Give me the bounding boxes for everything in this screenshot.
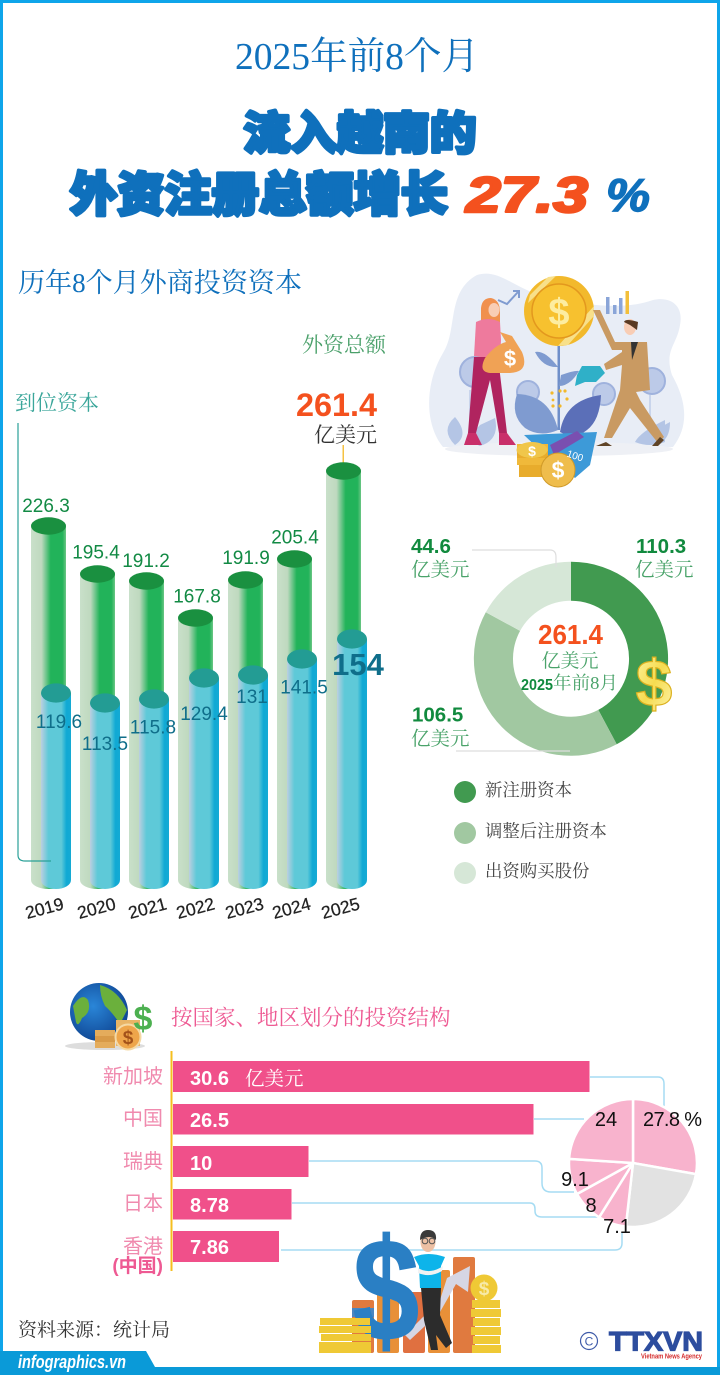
bars: disbursed capital bbox=[41, 629, 367, 889]
callout: 2025 total bbox=[296, 387, 377, 463]
illustration: man leaning on dollar sign bbox=[319, 1210, 501, 1372]
orange chart columns bbox=[352, 1257, 475, 1353]
year axis labels bbox=[23, 893, 362, 923]
banknotes and coins: $ bbox=[552, 457, 565, 483]
year axis labels: 2022 bbox=[174, 894, 217, 923]
values: disbursed: 113.5 bbox=[82, 734, 128, 755]
icon: globe with coins: $ bbox=[134, 1000, 153, 1038]
bar: Singapore: 新加坡 bbox=[103, 1065, 163, 1088]
bar: Hong Kong: 7.86 bbox=[190, 1237, 229, 1259]
logo: TTXVN: C bbox=[585, 1334, 594, 1348]
donut value labels bbox=[411, 535, 694, 750]
logo: TTXVN bbox=[580, 1326, 703, 1360]
pie labels: 8 bbox=[585, 1195, 597, 1217]
gold coin bbox=[524, 276, 594, 346]
bar: China: 中国 bbox=[123, 1107, 163, 1130]
values: disbursed: 154 bbox=[332, 647, 385, 682]
values: disbursed: 141.5 bbox=[280, 678, 328, 698]
label: disbursed capital bbox=[15, 391, 99, 861]
donut value labels: 110.3 bbox=[636, 535, 686, 558]
values: disbursed: 115.8 bbox=[130, 718, 176, 738]
bars: total foreign investment bbox=[31, 462, 361, 889]
section heading: by country: 按国家、地区划分的投资结构 bbox=[171, 1006, 451, 1030]
bar: Japan: 日本 bbox=[123, 1192, 163, 1215]
pie labels: 9.1 bbox=[561, 1169, 589, 1191]
chart: 3D cylinder bars bbox=[22, 462, 385, 923]
donut centre text bbox=[521, 619, 618, 694]
donut value labels: 44.6 bbox=[411, 535, 451, 558]
bar: Japan: 8.78 bbox=[190, 1195, 229, 1217]
banknotes and coins: $ bbox=[528, 443, 536, 459]
main headline: 外资注册总额增长 bbox=[70, 168, 448, 221]
values: disbursed: 131 bbox=[236, 687, 268, 708]
rising arrow bbox=[405, 1266, 470, 1340]
values: disbursed: 119.6 bbox=[36, 712, 82, 733]
illustration: investors growing money tree bbox=[429, 274, 684, 487]
logo: TTXVN: TTXVN bbox=[609, 1326, 703, 1356]
donut legend bbox=[454, 780, 607, 884]
values: total: 167.8 bbox=[173, 586, 221, 608]
small background coin flowers bbox=[460, 357, 665, 405]
pie labels bbox=[561, 1109, 702, 1238]
values: total bbox=[22, 496, 319, 608]
pie labels: 27.8 % bbox=[643, 1109, 702, 1131]
bar: Japan bbox=[123, 1189, 292, 1220]
illustration: man leaning on dollar sign: $ bbox=[479, 1279, 490, 1300]
callout: 2025 total: 261.4 bbox=[296, 387, 377, 423]
donut value labels: 亿美元 bbox=[411, 559, 470, 581]
bar: Singapore: 亿美元 bbox=[245, 1068, 304, 1090]
donut legend: 调整后注册资本 bbox=[485, 821, 607, 841]
year axis labels: 2023 bbox=[223, 894, 266, 923]
icon: gold dollar sign: $ bbox=[636, 646, 672, 720]
bar: Sweden: 瑞典 bbox=[123, 1150, 163, 1173]
values: total: 191.2 bbox=[122, 551, 170, 572]
woman with money bag: $ bbox=[504, 346, 516, 371]
year axis labels: 2021 bbox=[126, 894, 169, 923]
values: disbursed: 129.4 bbox=[180, 704, 228, 725]
banknotes and coins bbox=[516, 431, 597, 487]
icon: globe with coins bbox=[65, 983, 153, 1050]
pie chart: share by country bbox=[561, 1099, 702, 1238]
bar: Hong Kong: 香港 bbox=[123, 1235, 163, 1258]
water drops bbox=[550, 389, 569, 408]
bar: China: 26.5 bbox=[190, 1110, 229, 1132]
big blue dollar sign: $ bbox=[353, 1210, 419, 1372]
main headline: 27.3 bbox=[465, 167, 588, 223]
gold coin: $ bbox=[548, 292, 570, 334]
donut chart: 2025 composition bbox=[411, 535, 694, 756]
stem and leaves bbox=[558, 345, 560, 430]
icon: globe with coins: $ bbox=[123, 1028, 134, 1049]
title line: date: 2025年前8个月 bbox=[235, 36, 479, 78]
bar: Hong Kong bbox=[112, 1231, 279, 1277]
pie labels: 7.1 bbox=[603, 1216, 631, 1238]
donut legend: 新注册资本 bbox=[485, 780, 572, 800]
bar: China bbox=[123, 1104, 534, 1134]
donut centre text: 2025 bbox=[521, 677, 553, 694]
bar: Singapore bbox=[103, 1061, 590, 1092]
year axis labels: 2024 bbox=[270, 893, 313, 923]
source: 资料来源：统计局 bbox=[18, 1319, 170, 1341]
donut centre text: 亿美元 bbox=[541, 650, 599, 672]
connector lines: bars to pie bbox=[281, 1077, 664, 1250]
values: total: 226.3 bbox=[22, 496, 70, 517]
year axis labels: 2020 bbox=[75, 893, 118, 923]
man with watering can bbox=[575, 310, 664, 446]
values: disbursed bbox=[36, 647, 385, 755]
donut centre text: 年前8月 bbox=[553, 672, 618, 693]
donut leader lines bbox=[456, 550, 570, 751]
main headline: 流入越南的 bbox=[244, 108, 476, 159]
callout: 2025 total: 亿美元 bbox=[314, 423, 377, 447]
year axis labels: 2019 bbox=[23, 894, 66, 923]
donut legend: 出资购买股份 bbox=[485, 861, 589, 881]
bar: Singapore: 30.6 bbox=[190, 1068, 229, 1090]
pie labels: 24 bbox=[595, 1109, 617, 1131]
section heading: capital by year: 历年8个月外商投资资本 bbox=[18, 268, 302, 298]
donut centre text: 261.4 bbox=[538, 619, 603, 650]
woman with money bag bbox=[464, 298, 524, 445]
bar chart: investors by country bbox=[103, 1051, 590, 1277]
man bbox=[414, 1230, 452, 1350]
logo: TTXVN: Vietnam News Agency bbox=[641, 1354, 702, 1360]
banknotes and coins: 100 bbox=[565, 449, 585, 465]
main headline: % bbox=[606, 169, 650, 221]
bar: Sweden: 10 bbox=[190, 1153, 212, 1175]
label: disbursed capital: 到位资本 bbox=[15, 391, 99, 415]
logo: infographics.vn tab: infographics.vn bbox=[18, 1352, 126, 1372]
bar: Hong Kong: (中国) bbox=[112, 1255, 163, 1277]
donut value labels: 亿美元 bbox=[411, 728, 470, 750]
values: total: 195.4 bbox=[72, 542, 120, 564]
year axis labels: 2025 bbox=[319, 894, 362, 923]
values: total: 191.9 bbox=[222, 548, 270, 569]
main headline bbox=[70, 108, 650, 223]
coin stacks bbox=[319, 1274, 501, 1353]
donut value labels: 亿美元 bbox=[635, 559, 694, 581]
donut value labels: 106.5 bbox=[412, 704, 463, 726]
label: total foreign investment: 外资总额 bbox=[302, 333, 387, 357]
bar: Sweden bbox=[123, 1146, 308, 1177]
growth arrow and small bars bbox=[498, 291, 519, 304]
values: total: 205.4 bbox=[271, 528, 319, 548]
